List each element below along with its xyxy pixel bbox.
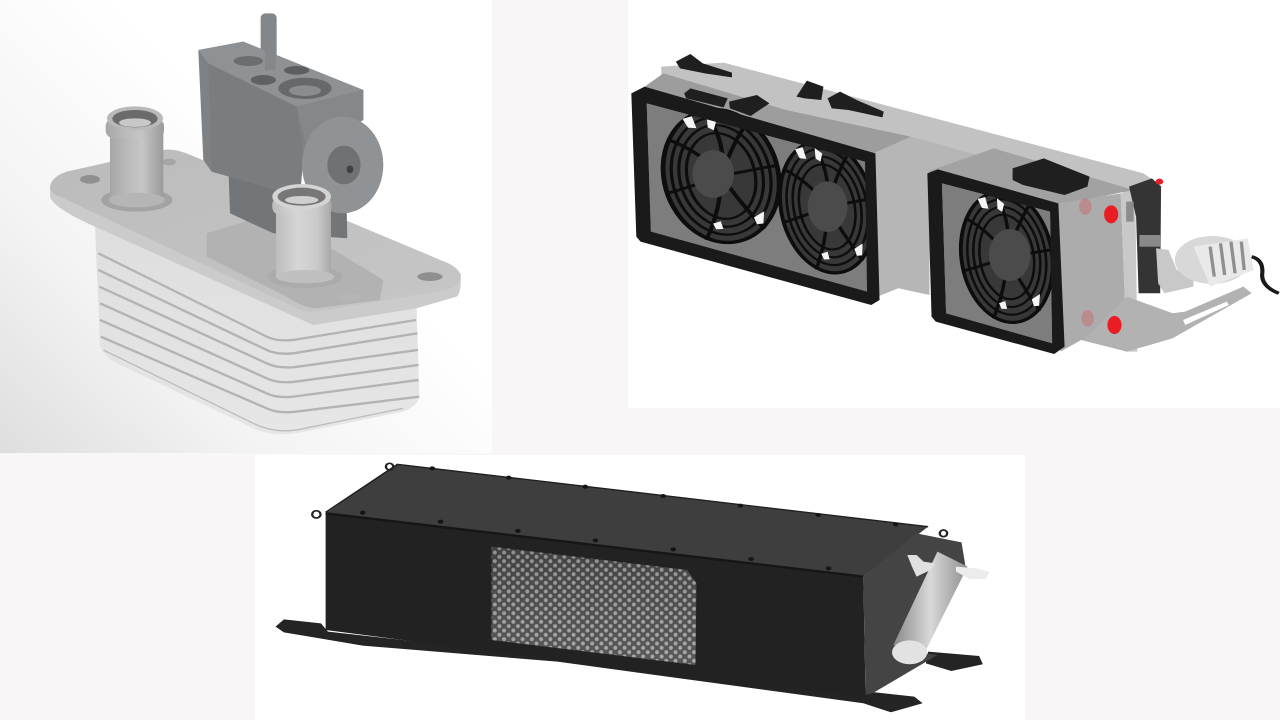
icon: expansion valve block — [198, 13, 383, 238]
icon: left pipe fitting — [101, 106, 172, 212]
icon: mounting plate — [50, 150, 461, 325]
icon: bolts — [360, 466, 899, 570]
icon: rear chassis — [645, 63, 1162, 352]
icon: top connectors — [676, 54, 1090, 195]
icon: right fan frame — [927, 169, 1065, 354]
icon: fan 1 — [649, 101, 793, 251]
panel: battery thermal unit — [255, 455, 1025, 720]
icon: side electronics stack — [1126, 178, 1161, 340]
icon: fan 2 — [768, 135, 886, 279]
icon: pump — [1156, 236, 1279, 293]
icon: dark housing — [312, 463, 965, 697]
icon: left double fan frame — [631, 87, 886, 305]
panel: fan module — [628, 0, 1280, 408]
icon: rail feet — [276, 619, 983, 712]
panel: oil cooler with valve — [0, 0, 492, 453]
icon: right pipe fitting — [268, 184, 342, 288]
icon: pump bracket — [1083, 287, 1252, 352]
icon: red markers — [1079, 179, 1163, 334]
icon: lifting rings — [312, 463, 947, 537]
icon: perforated vent — [492, 547, 696, 665]
icon: stacked plate body — [95, 227, 419, 435]
icon: side canister — [892, 552, 989, 664]
